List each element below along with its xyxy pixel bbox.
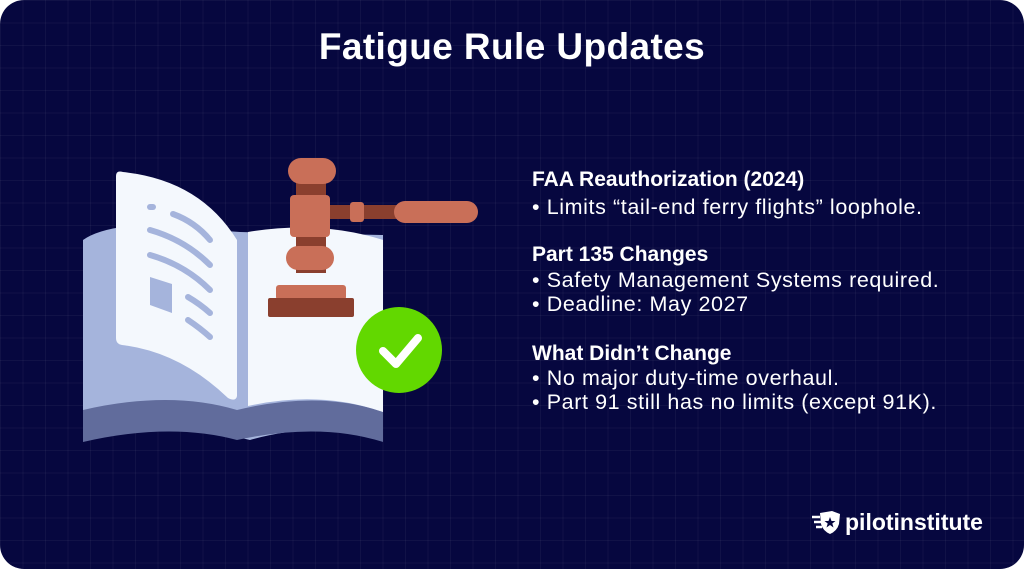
title: Fatigue Rule Updates: [319, 26, 705, 67]
bullet: • No major duty-time overhaul.: [532, 366, 840, 390]
heading: Part 135: Part 135 Changes: [532, 243, 708, 266]
bullet: • Deadline: May 2027: [532, 292, 749, 316]
bullet: • Part 91 still has no limits (except 91K).: [532, 390, 937, 414]
bullet: • Safety Management Systems required.: [532, 268, 939, 292]
heading: FAA: FAA Reauthorization (2024): [532, 168, 804, 191]
logo: pilotinstitute: [845, 508, 983, 534]
bullet: • Limits “tail-end ferry flights” loophole.: [532, 195, 923, 219]
heading: didn't change: What Didn’t Change: [532, 342, 731, 365]
